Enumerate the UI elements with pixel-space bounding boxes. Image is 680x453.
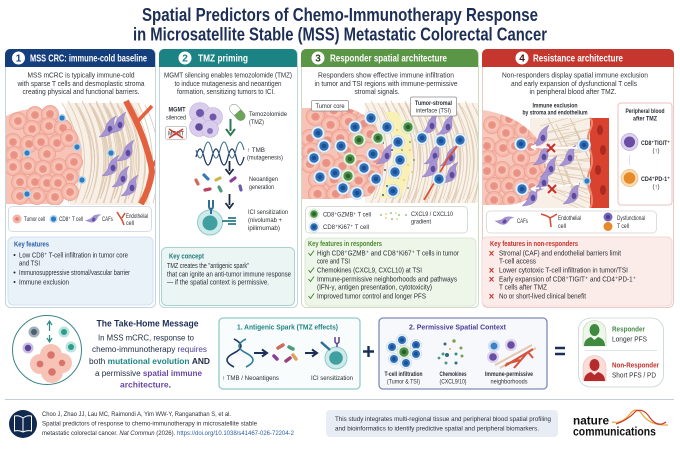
neoantigen label: generation (249, 185, 274, 191)
panel 4 legend: Dysfunctional (617, 216, 645, 222)
icon: chemokines (438, 339, 464, 364)
peripheral blood box: (↑) (652, 148, 660, 154)
icon: neoantigens (274, 345, 296, 361)
panel 3 key features: (IFN-γ, antigen presentation, cytotoxicity) (317, 284, 432, 292)
panel 3 legend: CD8⁺Ki67⁺ T cell (323, 224, 369, 231)
panel 1 intro text: MSS mCRC is typically immune-cold (28, 72, 135, 80)
panel 4 header: Resistance architecture (533, 54, 623, 64)
permissive context captions: T-cell infiltration (384, 372, 423, 378)
arrow (254, 350, 267, 356)
tumor-stromal interface label: interface (TSI) (416, 108, 451, 114)
take-home message: a permissive spatial immune (95, 369, 203, 378)
take-home message: both mutational evolution AND (89, 357, 210, 366)
panel 4 header: 4 (519, 54, 525, 64)
equals sign (555, 348, 565, 354)
plus sign (363, 346, 374, 357)
panel 3 key features: core and TSI (317, 258, 350, 266)
icon: T cell (321, 337, 347, 369)
panel 3 header: Responder spatial architecture (330, 54, 447, 64)
antigenic spark captions: ↑ TMB / Neoantigens (222, 376, 279, 382)
panel 4 key features: Early expansion of CD8⁺TIGIT⁺ and CD4⁺PD-1⁺ (499, 276, 636, 284)
panel 1 key features: Key features (14, 242, 49, 248)
permissive context captions (384, 372, 534, 386)
TMB label: (mutagenesis) (247, 156, 283, 162)
panel 1 key features: and TSI (19, 260, 40, 268)
responder label: Longer PFS (612, 334, 647, 344)
TMB label (247, 148, 283, 162)
take-home message: architecture . (120, 380, 171, 390)
panel 4 intro text: and early expansion of dysfunctional T cells (511, 80, 637, 88)
icon: neoantigens (196, 175, 241, 191)
panel 3 legend: CXCL9 / CXCL10 (411, 212, 454, 218)
panel: responder spatial architecture (301, 49, 479, 308)
antigenic spark captions: ICI sensitization (311, 376, 353, 382)
panel 1 legend (8, 206, 152, 232)
panel 2 header: 2 (182, 54, 188, 64)
tumor core label: Tumor core (316, 104, 345, 110)
take-home message: The Take-Home Message (96, 318, 198, 330)
box: permissive spatial context (379, 318, 547, 389)
ICI label: (nivolumab + (248, 218, 282, 224)
panel 1 legend: Endothelial (126, 214, 148, 220)
MGMT silenced label (166, 108, 186, 140)
panel 1 header: MSS CRC: immune-cold baseline (30, 54, 147, 64)
title (133, 5, 547, 44)
key concept box: Key concept (169, 254, 205, 260)
panel: TMZ priming (159, 49, 298, 308)
peripheral blood box: after TMZ (633, 116, 657, 122)
box: permissive spatial context: 2. Permissive Spatial Context (409, 322, 506, 332)
panel 3 legend (306, 206, 468, 233)
immune exclusion label (522, 104, 588, 116)
non-responder label: Short PFS / PD (612, 370, 656, 380)
panel 3 key features: Chemokines (CXCL9, CXCL10) at TSI (317, 268, 422, 274)
panel 4 legend (486, 210, 656, 233)
icon: T-cell cluster (386, 334, 422, 369)
peripheral blood box (618, 103, 672, 205)
panel 1 intro text (17, 72, 145, 96)
citation: Spatial predictors of response to chemo-immunotherapy in microsatellite stable (42, 422, 258, 428)
panel 3 key features: Immune-permissive neighborhoods and pathways (317, 276, 458, 284)
panel 1 intro text: creating physical and functional barriers. (22, 88, 140, 96)
permissive context captions: Chemokines (440, 372, 467, 378)
panel 3 key features: High CD8⁺GZMB⁺ and CD8⁺Ki67⁺ T cells in tumor (317, 250, 460, 258)
ICI label: ICI sensitization (248, 210, 288, 216)
temozolomide label (249, 112, 288, 126)
arrow: neoantigens to ICI (226, 194, 234, 208)
key concept box: that can ignite an anti-tumor immune response (167, 272, 291, 278)
icon: TMZ capsule (228, 102, 247, 122)
panel 1 legend: Tumor cell (24, 217, 45, 223)
panel 3 intro text: stromal signals. (354, 88, 400, 96)
key concept box: TMZ creates the "antigenic spark" (167, 263, 249, 270)
icon: tumor cell cluster (190, 102, 222, 138)
title: in Microsatellite Stable (MSS) Metastatic Colorectal Cancer (133, 24, 547, 44)
panel 4 legend: cell (558, 224, 566, 230)
panel 2 header (159, 49, 297, 67)
panel 4 key features: T cells after TMZ (499, 284, 547, 292)
panel 1 key features: Immunosuppressive stromal/vascular barrier (19, 270, 131, 277)
panel 1 legend: cell (126, 221, 134, 227)
study note: This study integrates multi-regional tissue and peripheral blood spatial profiling (335, 417, 551, 423)
icon: responder (583, 320, 606, 346)
ICI label: ipilimumab) (248, 226, 280, 232)
non-responder label (612, 360, 659, 380)
arrow: DNA to neoantigens (226, 161, 234, 174)
responder label: Responder (612, 324, 645, 334)
illustration: responder tumor microenvironment (302, 100, 478, 203)
panel 3 key features (305, 238, 476, 306)
panel 1 legend: CAFs (102, 217, 113, 223)
peripheral blood box: (↑) (652, 184, 660, 190)
box: antigenic spark (219, 318, 360, 389)
panel 4 key features: No or short-lived clinical benefit (499, 294, 586, 300)
panel 2 intro text: to induce mutagenesis and neoantigen (174, 80, 282, 88)
peripheral blood box: CD4⁺PD-1⁺ (641, 176, 670, 183)
panel 3 header (301, 49, 478, 67)
study note: and bioinformatics to identify predictive spatial and peripheral biomarkers. (335, 426, 539, 432)
panel 3 intro text (314, 72, 458, 96)
panel 3 key features: Improved tumor control and longer PFS (317, 294, 426, 300)
panel 3 intro text: in tumor and TSI regions with immune-permissive (314, 80, 458, 88)
tumor core label (312, 100, 348, 111)
key concept box (162, 248, 294, 306)
icon: DNA (227, 339, 253, 367)
panel 1 legend: CD8⁺ T cell (59, 216, 83, 223)
citation: metastatic colorectal cancer. Nat Commun (2026). https://doi.org/10.1038/s41467-026-72204-2 (42, 431, 295, 437)
panel 4 key features: Lower cytotoxic T-cell infiltration in tumor/TSI (499, 268, 628, 274)
panel 2 header: TMZ priming (198, 54, 248, 64)
TMB label: ↑ TMB (247, 148, 265, 154)
icon: T cell with checkpoint antibody (198, 200, 236, 235)
panel 1 header: 1 (16, 54, 22, 64)
antigenic spark captions (222, 376, 353, 382)
temozolomide label: Temozolomide (249, 112, 288, 118)
panel 4 legend: CAFs (517, 219, 528, 225)
outcome box (578, 318, 664, 387)
immune exclusion label: by stroma and endothelium (522, 110, 588, 116)
panel 2 intro text (164, 72, 292, 96)
peripheral blood box: Peripheral blood (626, 109, 665, 115)
title: Spatial Predictors of Chemo-Immunotherapy Response (142, 5, 538, 25)
panel 4 intro text: Non-responders display spatial immune exclusion (502, 72, 648, 80)
MGMT silenced label: MGMT (168, 132, 184, 138)
panel: MSS CRC immune-cold baseline (4, 49, 159, 308)
panel 4 legend: T cell (617, 224, 629, 230)
icon: non-responder (583, 356, 606, 381)
box: antigenic spark: 1. Antigenic Spark (TMZ effects) (237, 322, 338, 332)
panel 3 legend: CD8⁺GZMB⁺ T cell (323, 212, 371, 218)
panel 3 legend: gradient (411, 220, 431, 226)
icon: immune-permissive neighborhood (487, 339, 536, 368)
panel 4 key features: T-cell access (499, 258, 537, 266)
panel 4 intro text: in peripheral blood after TMZ. (530, 88, 617, 96)
icon: book (9, 410, 37, 438)
key concept box: — if the spatial context is permissive. (167, 280, 269, 286)
permissive context captions: neighborhoods (490, 380, 528, 386)
panel 3 header: 3 (315, 54, 321, 64)
logo: nature communications: communications (573, 424, 656, 438)
panel 2 intro text: formation, sensitizing tumors to ICI. (177, 88, 275, 96)
panel 1 key features: Immune exclusion (19, 280, 69, 286)
take-home message: In MSS mCRC, response to (98, 334, 195, 342)
panel 1 header (5, 49, 155, 67)
panel 4 intro text (502, 72, 648, 96)
icon: DNA mutagenesis (196, 142, 244, 165)
panel: resistance architecture (478, 49, 674, 308)
arrow: capsule to DNA (226, 119, 235, 135)
tumor-stromal interface label: Tumor-stromal (415, 101, 452, 107)
panel 3 intro text: Responders show effective immune infiltration (318, 72, 454, 80)
take-home message (89, 318, 210, 390)
panel 4 key features (482, 237, 672, 306)
take-home illustration (12, 316, 82, 384)
arrow (305, 350, 317, 356)
panel 4 header (482, 49, 674, 67)
MGMT silenced label: silenced (166, 116, 186, 122)
ICI label (248, 210, 288, 232)
non-responder label: Non-Responder (612, 360, 659, 370)
logo: nature communications (573, 410, 668, 438)
panel 4 key features: Key features in non-responders (490, 241, 578, 248)
immune exclusion label: Immune exclusion (532, 104, 578, 110)
responder label (612, 324, 647, 344)
study note (326, 410, 558, 437)
peripheral blood box: CD8⁺TIGIT⁺ (641, 140, 670, 147)
tumor-stromal interface label (410, 97, 456, 116)
panel 3 key features: Key features in responders (308, 241, 382, 248)
MGMT silenced label: MGMT (168, 108, 186, 114)
temozolomide label: (TMZ) (249, 120, 264, 126)
permissive context captions: (CXCL9/10) (440, 380, 466, 386)
permissive context captions: (Tumor & TSI) (387, 380, 420, 386)
panel 1 intro text: with sparse T cells and desmoplastic stroma (17, 80, 145, 88)
permissive context captions: Immune-permissive (485, 372, 534, 378)
neoantigen label: Neoantigen (249, 177, 278, 183)
take-home message: chemo-immunotherapy requires (92, 345, 207, 354)
citation (42, 412, 295, 437)
citation: Choo J, Zhao JJ, Lau MC, Raimondi A, Yim WW-Y, Ranganathan S, et al. (42, 412, 231, 418)
illustration: immune exclusion barrier (478, 108, 609, 213)
panel 1 key features: Low CD8⁺ T-cell infiltration in tumor core (19, 252, 128, 260)
neoantigen label (249, 177, 278, 191)
panel 4 key features: Stromal (CAF) and endothelial barriers limit (499, 250, 621, 258)
panel 1 key features (8, 237, 153, 305)
panel 2 intro text: MGMT silencing enables temozolomide (TMZ) (164, 72, 292, 80)
logo: nature communications: nature (573, 414, 609, 428)
panel 4 legend: Endothelial (558, 216, 581, 222)
illustration: immune-cold tumor and stroma (4, 101, 159, 206)
